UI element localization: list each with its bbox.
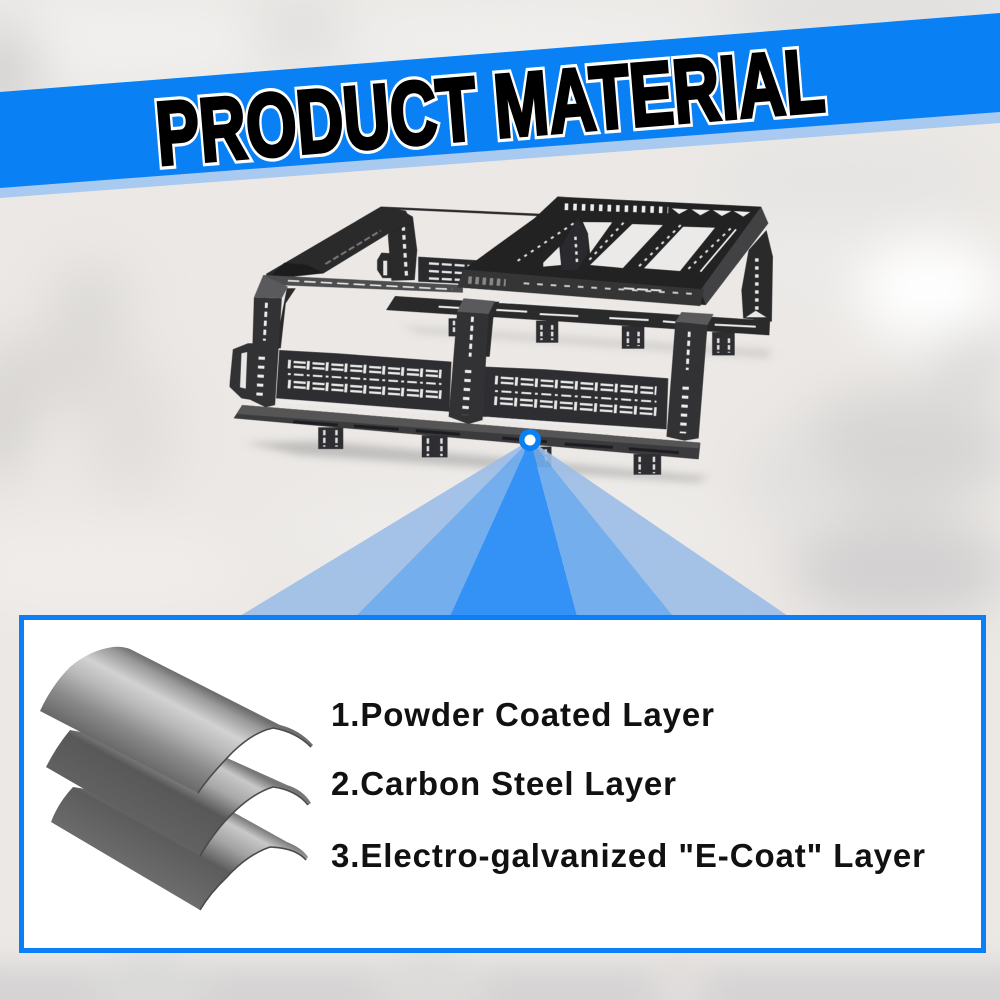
- roof left arch inner: [561, 218, 588, 270]
- callout fan rays: [240, 440, 788, 616]
- front left handle: [229, 343, 254, 400]
- front bottom rail: [234, 400, 700, 459]
- text: layer 1: 1.Powder Coated Layer: [331, 696, 714, 733]
- roof rack platform: [457, 197, 768, 306]
- centre mounting foot: [524, 447, 551, 467]
- roof front beam: [457, 269, 704, 306]
- text: layer 3: 3.Electro-galvanized "E-Coat" Layer: [331, 837, 925, 874]
- ground shadows: [245, 326, 770, 482]
- panel: material layers: [22, 618, 984, 950]
- front mounting feet: [318, 427, 661, 475]
- rear arch, panel and handle: [377, 212, 484, 284]
- left side roof beam: [266, 207, 413, 279]
- rear right arch: [741, 230, 773, 322]
- steel layer 1: [40, 647, 313, 793]
- title banner: [0, 13, 1000, 198]
- rear lower rail and feet: [386, 296, 770, 355]
- text: layer 2: 2.Carbon Steel Layer: [331, 765, 676, 802]
- steel layer 3: [51, 787, 308, 910]
- roof rear slots and truss: [565, 207, 668, 210]
- banner light underside strip: [0, 111, 1000, 198]
- banner blue band: [0, 13, 1000, 188]
- roof openings: [543, 222, 715, 271]
- steel layer 2: [46, 730, 311, 856]
- callout marker dot: [519, 429, 541, 451]
- product: truck bed rack: [229, 197, 773, 482]
- rear thin crossbar: [381, 208, 541, 215]
- front top rail: [263, 275, 463, 293]
- roof crossbar holes: [516, 223, 731, 269]
- front posts: [251, 275, 714, 441]
- icon: stacked steel layers: [40, 647, 313, 910]
- roof right side bevel: [700, 207, 768, 305]
- front panels with slots: [276, 350, 668, 429]
